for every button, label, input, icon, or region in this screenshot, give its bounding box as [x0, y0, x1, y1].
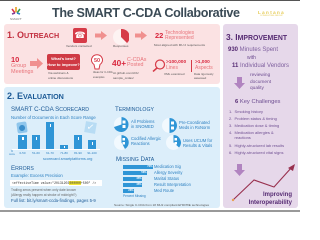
text: ucum: [183, 138, 212, 148]
logo: SMART: SMART: [10, 17, 22, 21]
title: The SMART C-CDA Collaborative: [52, 6, 240, 20]
callout: what's best: What's best?: [51, 56, 76, 61]
source note: Source: Single C-CDA from 18 MU2 compliant EHR/HIE technologies: [114, 203, 209, 207]
arrow 3: [30, 58, 43, 69]
icon: bulb with 50: [91, 54, 103, 70]
stat: group meetings: Group: [11, 63, 26, 69]
logo: SMART: [10, 7, 22, 21]
caption: meaningful use: Most aligned with MU 2 requirements: [154, 43, 205, 47]
text: ucum: Uses UCUM for: [183, 138, 212, 143]
text: pre-coordinated: [179, 120, 210, 130]
bar chart: 0-50: [19, 151, 26, 155]
caption: webinars: online discussions: [48, 76, 73, 80]
divider stat: aspects: Aspects: [195, 65, 213, 71]
stat: C-CDAs posted: 40+: [112, 58, 126, 68]
text: improving interoperability: [249, 191, 292, 207]
text: reviewing quality: quality: [250, 86, 264, 91]
subheading: errors: ERRORS: [11, 164, 34, 172]
icon: bulb with 50: 50: [94, 58, 100, 64]
bar chart: missing data: 72%: [147, 165, 152, 168]
stat: vendors: 11 Individual Vendors: [232, 62, 289, 68]
stat: group meetings: [11, 55, 34, 75]
stat: technologies represented: Represented: [165, 35, 194, 41]
code sample: <effectiveTime value="20131203000000+500" />: [12, 181, 96, 185]
divider stat: aspects: [191, 60, 214, 72]
list: challenges: reactions: [235, 135, 251, 140]
icon: pie 4: [166, 135, 181, 150]
stat: lines: >100,000: [166, 60, 186, 65]
icon: down arrow 1: [234, 77, 245, 89]
caption: data: assessed: [194, 76, 206, 80]
stat: lines: [166, 60, 186, 71]
text: reviewing quality: document: [250, 80, 271, 84]
panel: evaluation: [4, 87, 220, 208]
bar chart: missing data: 56%: [141, 171, 146, 174]
caption: vendors contacted: Vendors contacted: [66, 44, 92, 48]
list: challenges: 2. Problem status & timing: [229, 116, 277, 121]
icon: phone: [73, 28, 87, 43]
caption: github: At github.com/chb/: [113, 71, 139, 75]
stat: group meetings: Meetings: [11, 69, 33, 75]
bar chart: missing data: 45%: [136, 183, 142, 186]
subheading: missing data: MISSING DATA: [116, 156, 154, 162]
icon: check: [84, 121, 97, 134]
list: challenges: 1. Smoking history: [229, 109, 263, 114]
stat: key challenges: 6 Key Challenges: [235, 98, 280, 104]
bar chart: missing data: 26%: [128, 189, 134, 192]
text: all problems: in SNOMED: [131, 124, 154, 129]
text: reviewing quality: reviewing: [250, 73, 270, 78]
icon: pie 2: [162, 118, 177, 133]
text: with: with: [247, 55, 256, 61]
bottom edge bar: [0, 210, 300, 212]
logo: partner: Lantana: [258, 10, 285, 15]
text: trailing zeros: [11, 188, 76, 197]
caption: responses: Responses: [113, 44, 128, 48]
icon: check: ✓: [86, 121, 95, 133]
caption: github: sample_ccdas/: [113, 76, 134, 80]
list: challenges: 3. Medication dose & timing: [229, 123, 279, 128]
bar chart: missing data: Percent Missing: [123, 194, 146, 198]
icon: responses pie: [113, 29, 129, 45]
bar chart: score: [9, 153, 15, 156]
heading: improvement: 3. IMPROVEMENT: [226, 32, 287, 42]
text: trailing zeros: (Allergy really happen at stroke of midnight?): [11, 193, 76, 197]
callout: what's best: [47, 54, 80, 70]
stat: technologies represented: 22: [155, 31, 163, 40]
list: challenges: 5. Highly-structured lab results: [229, 143, 284, 148]
arrow: trend line: [229, 164, 295, 202]
bar chart: 51-60: [32, 151, 40, 155]
heading: evaluation: 2. EVALUATION: [7, 91, 64, 101]
bar chart: missing data: 45%: [136, 177, 142, 180]
bar chart: 81-90: [74, 151, 82, 155]
top edge bar: [0, 0, 300, 1]
icon: broken: [16, 121, 28, 134]
text: full list: Full list: bit.ly/smart-ccda-findings, pages 5-9: [11, 198, 96, 202]
panel: outreach: [4, 24, 220, 84]
text: all problems: [131, 119, 155, 129]
logo: partner: CONSULTING GROUP: [260, 15, 283, 17]
caption: ideas: Ideas for C-CDA: [93, 71, 113, 74]
icon: phone: ☎: [74, 30, 86, 40]
stat: lines: Lines: [166, 65, 178, 71]
code sample: [10, 180, 102, 186]
icon: pie 3: [114, 135, 129, 150]
icon: pie 1: [114, 117, 129, 132]
icon: down arrow 2: [234, 164, 245, 176]
bar chart: 71-80: [60, 151, 68, 155]
text: reviewing quality: [250, 72, 272, 91]
panel: improvement: [223, 24, 298, 208]
caption: xml: XML examined: [164, 72, 185, 76]
bar chart: missing data: Marital Status: [154, 176, 179, 181]
bar chart: [9, 122, 100, 156]
bar chart: %: [11, 150, 13, 153]
icon: magnifier: [152, 59, 166, 72]
text: trailing zeros: Trailing zeros present when only date known: [11, 188, 76, 192]
heading: outreach: 1. OUTREACH: [7, 30, 59, 40]
text: pre-coordinated: Pre-Coordinated: [179, 120, 210, 125]
arrow 2: [135, 31, 147, 40]
text: pre-coordinated: Meds in RxNorm: [179, 125, 210, 130]
caption: example: Example: Excess Precision: [11, 172, 63, 178]
stat: C-CDAs posted: Posted: [127, 62, 144, 68]
divider stat: aspects: >1,000: [195, 60, 210, 65]
stat: group meetings: 10: [11, 55, 19, 64]
stat: technologies represented: Technologies: [165, 30, 194, 36]
caption: data: [194, 72, 214, 80]
stat: C-CDAs posted: C-CDAs: [127, 57, 146, 63]
list: challenges: 6. Highly-structured vital signs: [229, 150, 283, 155]
stat: technologies represented: [155, 30, 194, 41]
caption: github: [113, 71, 139, 80]
list: challenges: 4. Medication allergies &: [229, 130, 274, 135]
subheading: scorecard: SMART C-CDA SCORECARD: [11, 106, 89, 112]
text: improving interoperability: Interoperability: [249, 200, 292, 206]
subheading: terminology: TERMINOLOGY: [115, 106, 154, 112]
text: codified allergic: Reactions: [131, 141, 150, 146]
arrow 1: [95, 31, 107, 40]
caption: webinars: Via webinars &: [48, 71, 69, 75]
chart label: Number of Documents in Each Score Range: [11, 114, 96, 120]
bar chart: missing data: [123, 164, 191, 198]
bar chart: missing data: Med Route: [154, 188, 174, 193]
bar chart: missing data: Allergy Severity: [154, 170, 182, 175]
text: improving interoperability: Improving: [263, 192, 292, 198]
caption: ideas: examples: [93, 76, 105, 78]
bar chart: 61-70: [46, 151, 54, 155]
caption: data: Data rigorously: [194, 72, 213, 76]
callout: what's best: How to improve?: [47, 62, 80, 67]
caption: webinars: [48, 71, 73, 80]
bar chart: missing data: Result Interpretation: [154, 182, 191, 187]
stat: C-CDAs posted: [112, 57, 146, 68]
text: codified allergic: Codified Allergic: [131, 136, 161, 141]
caption: ideas: [93, 71, 113, 78]
list: challenges: [229, 109, 284, 155]
text: ucum: Results & Vitals: [183, 143, 212, 148]
text: all problems: All Problems: [131, 119, 155, 124]
caption: score url: scorecard.smartplatforms.org: [43, 157, 92, 161]
bar chart: 91-100: [87, 151, 97, 155]
text: codified allergic: [131, 136, 161, 146]
bar chart: missing data: Medication Sig: [154, 164, 181, 169]
stat: minutes spent: 930 Minutes Spent: [228, 46, 278, 52]
